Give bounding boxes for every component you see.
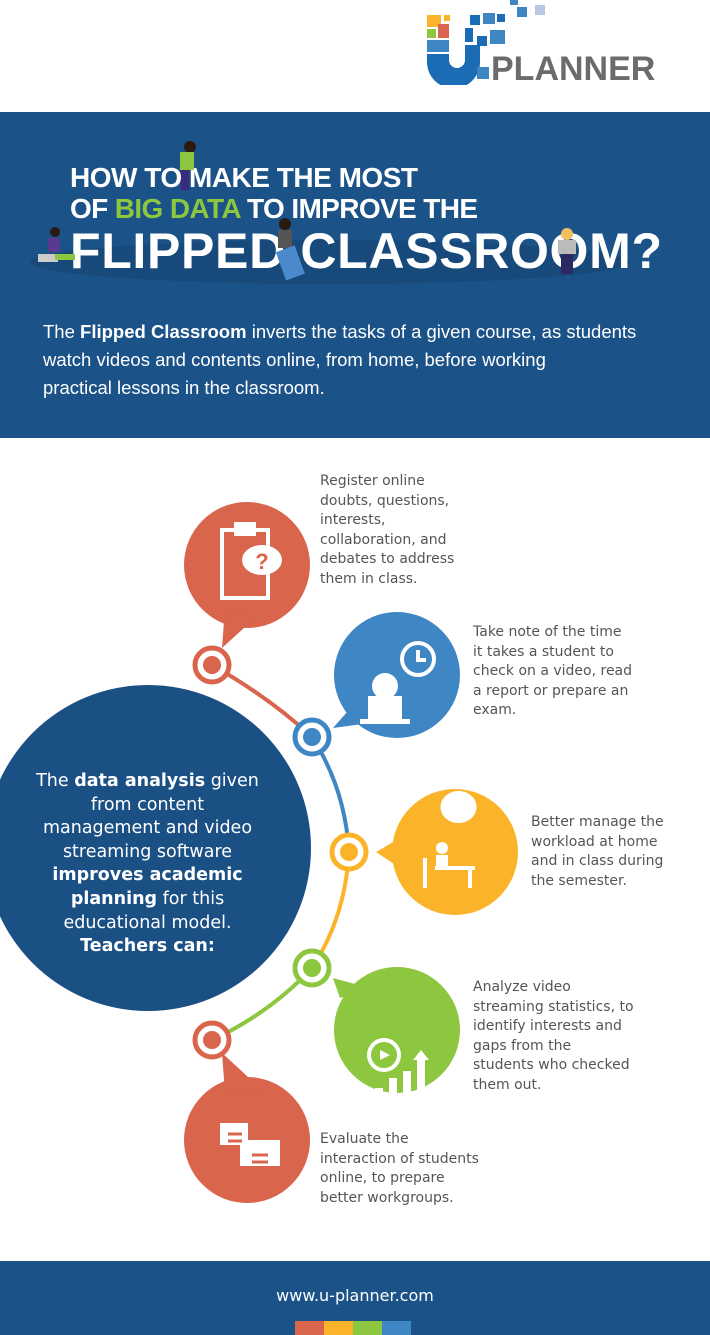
item 1 text: collaboration, and: [320, 532, 446, 548]
item 4 text: students who checked: [473, 1057, 630, 1073]
item 4 text: identify interests and: [473, 1018, 622, 1034]
item 4 text: gaps from the: [473, 1038, 571, 1054]
item 2 text: it takes a student to: [473, 644, 614, 660]
item 3 text: workload at home: [531, 834, 657, 850]
footer: [0, 1261, 710, 1335]
item 2 text: [472, 624, 632, 718]
circle text: The data analysis given: [36, 771, 259, 791]
logo: [427, 0, 655, 85]
item 2 text: a report or prepare an: [473, 683, 628, 699]
intro text: watch videos and contents online, from home, before working: [43, 349, 546, 370]
item 5 text: online, to prepare: [320, 1170, 445, 1186]
circle text: educational model.: [63, 913, 232, 933]
header band: [0, 112, 710, 438]
circle text: streaming software: [63, 842, 232, 862]
title: [30, 141, 662, 284]
item 3 text: [531, 814, 664, 889]
item 4 text: them out.: [473, 1077, 541, 1093]
item 2 text: Take note of the time: [473, 624, 621, 640]
item 5 text: better workgroups.: [320, 1190, 454, 1206]
item 5 text: Evaluate the: [320, 1131, 409, 1147]
item 1 text: [320, 473, 454, 587]
item 1 text: doubts, questions,: [320, 493, 449, 509]
item 1 text: Register online: [320, 473, 425, 489]
circle text: from content: [91, 795, 204, 815]
timeline diagram: ?: [255, 549, 269, 574]
item 2 text: exam.: [473, 702, 516, 718]
item 4 text: streaming statistics, to: [473, 999, 634, 1015]
item 4 text: [473, 979, 634, 1093]
item 5 text: interaction of students: [320, 1151, 479, 1167]
intro text: [43, 321, 636, 398]
circle text: Teachers can:: [80, 936, 215, 956]
color bar: [295, 1321, 411, 1335]
intro text: The Flipped Classroom inverts the tasks of a given course, as students: [43, 321, 636, 342]
url: www.u-planner.com: [276, 1286, 434, 1305]
item 1 text: them in class.: [320, 571, 417, 587]
item 3 text: and in class during: [531, 853, 663, 869]
intro text: practical lessons in the classroom.: [43, 377, 325, 398]
circle text: improves academic: [52, 865, 243, 885]
item 5 text: [320, 1131, 479, 1206]
circle text: [36, 771, 259, 956]
item 3 text: Better manage the: [531, 814, 664, 830]
item 2 text: check on a video, read: [473, 663, 632, 679]
timeline diagram: [0, 502, 518, 1203]
circle text: planning for this: [71, 889, 224, 909]
item 3 text: the semester.: [531, 873, 627, 889]
title: HOW TO MAKE THE MOST: [70, 162, 418, 193]
title: FLIPPED CLASSROOM?: [70, 223, 662, 279]
circle text: management and video: [43, 818, 252, 838]
item 4 text: Analyze video: [473, 979, 571, 995]
title: OF BIG DATA TO IMPROVE THE: [70, 193, 478, 224]
item 1 text: interests,: [320, 512, 385, 528]
item 1 text: debates to address: [320, 551, 454, 567]
